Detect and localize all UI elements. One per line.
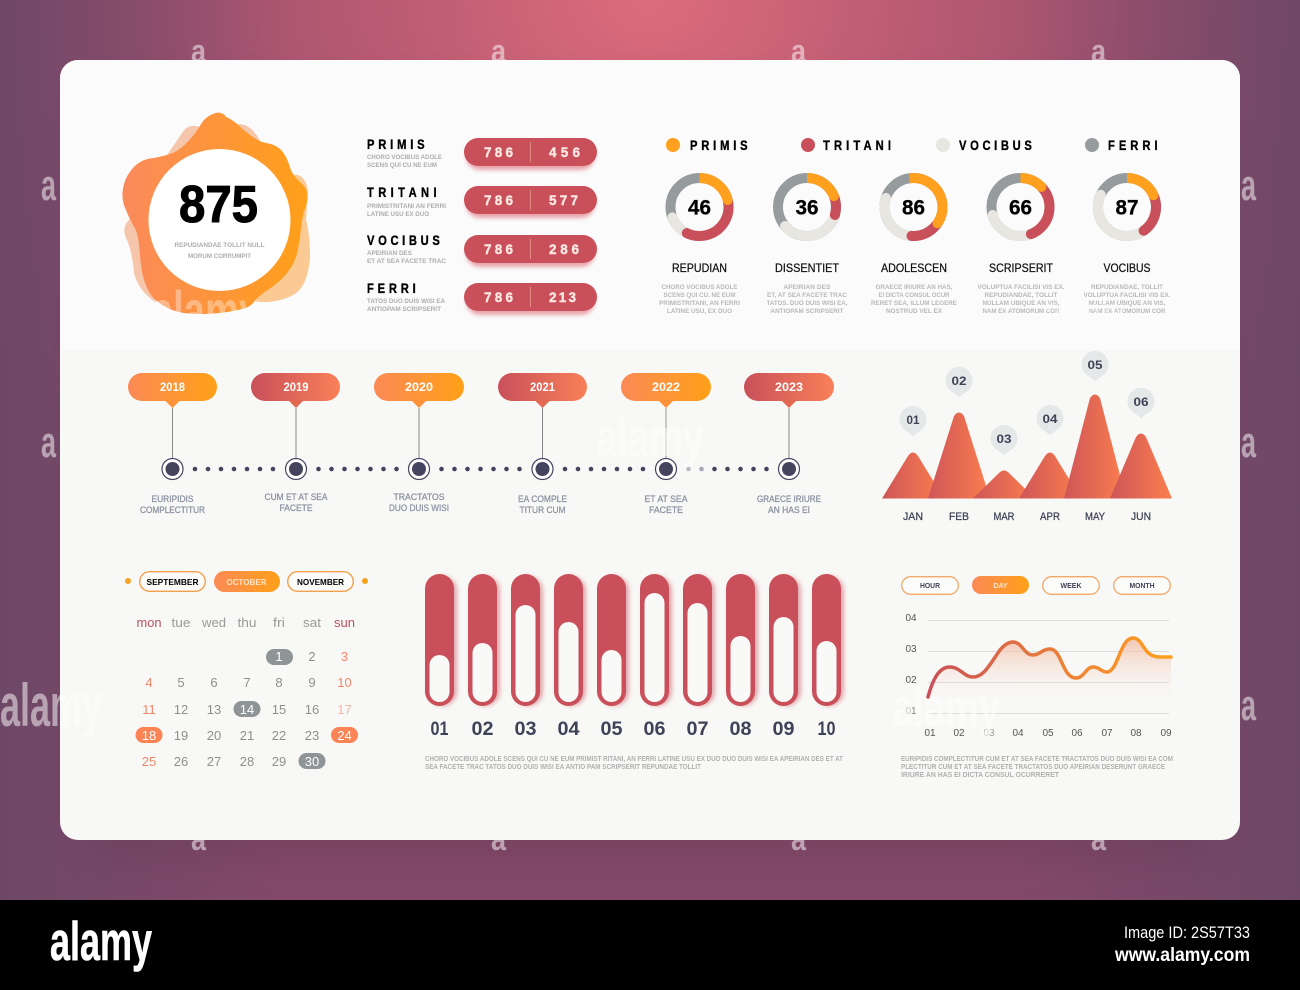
milestone 2020: [374, 373, 464, 514]
month labels: [903, 511, 1151, 523]
month selector: SEPTEMBER: [146, 577, 198, 587]
footer bar: [0, 900, 1300, 990]
website: www.alamy.com: [1114, 945, 1250, 966]
row: primis: PRIMIS: [367, 137, 425, 152]
pin 04: 04: [1042, 412, 1058, 426]
date grid: 17: [337, 702, 352, 717]
milestone 2019: FACETE: [280, 503, 312, 514]
date grid: 26: [174, 754, 188, 769]
milestone 2021: [498, 373, 587, 516]
pin 03: 03: [996, 432, 1012, 446]
range buttons: DAY: [994, 581, 1008, 590]
range buttons: WEEK: [1060, 581, 1082, 590]
donut: dissentiet: ET, AT SEA FACETE TRAC: [767, 292, 847, 299]
date grid: 11: [142, 702, 156, 717]
month labels: JAN: [903, 511, 923, 523]
donut: repudian: PRIMISTRITANI, AN FERRI: [659, 300, 740, 307]
row: vocibus: 786: [484, 242, 513, 257]
date grid: 22: [272, 728, 286, 743]
row: tritani: [367, 185, 597, 218]
bar chart caption: CHORO VOCIBUS ADOLE SCENS QUI CU NE EUM PRIMIST RITANI, AN FERRI LATINE USU EX DUO DUO DUIS WISI EA APEIRIAN DES ET AT: [425, 756, 844, 763]
bar labels: 03: [514, 719, 536, 740]
row: tritani: TRITANI: [367, 185, 437, 200]
donut: dissentiet: APEIRIAN DES: [784, 284, 831, 291]
pin 05: [1082, 351, 1108, 381]
x axis labels: 09: [1160, 728, 1172, 739]
date grid: 5: [177, 675, 185, 690]
bar labels: 09: [772, 719, 794, 740]
milestone 2019: CUM ET AT SEA: [264, 492, 328, 503]
weekday header: mon: [136, 615, 162, 630]
donut: vocibus: [1084, 167, 1171, 315]
bar labels: 10: [818, 719, 836, 740]
donut: vocibus: REPUDIANDAE, TOLLIT: [1091, 284, 1163, 291]
pin 02: 02: [952, 374, 967, 388]
pin 01: 01: [906, 413, 920, 427]
date grid: 29: [272, 754, 286, 769]
month labels: JUN: [1131, 511, 1151, 523]
donut: repudian: LATINE USU, EX DUO: [667, 308, 732, 315]
dashboard card: [60, 60, 1240, 840]
date grid: 7: [243, 675, 251, 690]
x axis labels: 03: [983, 728, 995, 739]
donut: scripserit: VOLUPTUA FACILISI VIS EX.: [978, 284, 1065, 291]
x axis labels: [924, 728, 1172, 739]
watermarks: [0, 279, 1125, 739]
watermark letters on background: a: [1241, 681, 1256, 730]
line chart caption: EURIPIDIS COMPLECTITUR CUM ET AT SEA FACETE TRACTATOS DUO DUIS WISI EA COM: [901, 756, 1173, 763]
month labels: APR: [1040, 511, 1060, 523]
timeline dots: [193, 467, 769, 471]
weekday header: thu: [238, 615, 256, 630]
donut: adolescen: RERET SEA, ILLUM LEGERE: [871, 300, 958, 307]
watermark letters on background: a: [191, 33, 206, 69]
row: ferri: FERRI: [367, 281, 416, 296]
total caption: REPUDIANDAE TOLLIT NULL: [174, 242, 264, 249]
donut: adolescen: NOSTRUD VEL EX: [886, 308, 943, 315]
x axis labels: 07: [1101, 728, 1113, 739]
row: vocibus: 286: [549, 242, 579, 257]
milestone 2021: EA COMPLE: [518, 494, 567, 505]
month labels: MAY: [1085, 511, 1106, 523]
row: ferri: 213: [549, 290, 576, 305]
donut: scripserit: [978, 166, 1065, 315]
donut: adolescen: ADOLESCEN: [881, 261, 947, 275]
donut: adolescen: 86: [902, 196, 925, 220]
donut: repudian: REPUDIAN: [672, 261, 727, 275]
panel: category value rows: [367, 137, 597, 315]
bar fills: [430, 593, 836, 702]
pin 06: [1128, 388, 1154, 418]
month selector: NOVEMBER: [297, 577, 344, 587]
date grid: 25: [142, 754, 156, 769]
row: vocibus: ET AT SEA FACETE TRAC: [367, 258, 446, 265]
watermarks: alamy: [892, 678, 1000, 738]
watermark letters on background: a: [491, 821, 506, 857]
milestone 2020: DUO DUIS WISI: [389, 503, 449, 514]
timeline: [128, 373, 834, 516]
bar chart caption: SEA FACETE TRAC TATOS DUO DUIS WISI EA ANTIO PAM SCRIPSERIT REPUNDAE TOLLIT: [425, 764, 702, 771]
watermark letters on background: a: [791, 33, 806, 69]
donut: vocibus: NULLAM UBIQUE AN VIS,: [1088, 300, 1166, 307]
date grid: 9: [308, 675, 316, 690]
milestone 2021: TITUR CUM: [520, 505, 566, 516]
watermark letters on background: a: [1241, 418, 1256, 467]
pin 06: 06: [1134, 395, 1149, 409]
date grid: 13: [207, 702, 221, 717]
donut: scripserit: NULLAM UBIQUE AN VIS,: [982, 300, 1060, 307]
x axis labels: 06: [1071, 728, 1083, 739]
x axis labels: 08: [1130, 728, 1142, 739]
watermark letters on background: a: [1091, 33, 1106, 69]
milestone 2023: GRAECE IRIURE: [757, 494, 821, 505]
mountain chart: [882, 351, 1172, 523]
range buttons: HOUR: [920, 581, 941, 590]
image id: Image ID: 2S57T33: [1124, 923, 1250, 942]
month labels: FEB: [949, 511, 969, 523]
watermarks: alamy: [596, 408, 704, 468]
y axis labels: [905, 613, 917, 717]
month selector: [125, 571, 368, 592]
row: ferri: TATOS DUO DUIS WISI EA: [367, 298, 445, 305]
area under curve: [928, 638, 1171, 716]
y axis labels: 02: [905, 675, 917, 686]
range buttons: [902, 576, 1170, 594]
date grid: 21: [240, 728, 254, 743]
donut: repudian: CHORO VOCIBUS ADOLE: [662, 284, 738, 291]
watermark letters on background: a: [1241, 161, 1256, 210]
row: primis: 456: [549, 145, 580, 160]
donut: scripserit: NAM EX ATOMORUM COR: [982, 308, 1060, 315]
donut: dissentiet: 36: [796, 196, 818, 220]
row: vocibus: [367, 233, 597, 267]
date grid: 14: [240, 702, 254, 717]
weekday header: fri: [273, 615, 285, 630]
y axis labels: 04: [905, 613, 917, 624]
total caption: MORUM CORRUMPIT: [188, 253, 251, 260]
bar labels: 07: [686, 719, 708, 740]
row: tritani: LATINE USU EX DUO: [367, 211, 429, 218]
pin 01: [900, 406, 926, 436]
y axis labels: 01: [905, 706, 917, 717]
donut: repudian: SCENS QUI CU. NE EUM: [664, 292, 736, 299]
date grid: 24: [337, 728, 352, 743]
bars: [425, 574, 841, 706]
date grid: 3: [341, 649, 348, 664]
milestone 2023: AN HAS EI: [768, 505, 810, 516]
line chart: [901, 576, 1173, 779]
date grid: 8: [275, 675, 283, 690]
date grid: 4: [145, 675, 153, 690]
date grid: 12: [174, 702, 188, 717]
line chart caption: IRIURE AN HAS EI DICTA CONSUL OCURRERET: [901, 772, 1060, 779]
donut: scripserit: REPUDIANDAE, TOLLIT: [984, 292, 1058, 299]
date grid: 16: [305, 702, 319, 717]
watermark letters on background: a: [1091, 821, 1106, 857]
date grid: [136, 649, 358, 769]
pin 03: [990, 425, 1018, 455]
date grid: 10: [337, 675, 352, 690]
footer logo: alamy: [50, 910, 152, 972]
row: ferri: ANTIOPAM SCRIPSERIT: [367, 306, 441, 313]
row: tritani: PRIMISTRITANI AN FERRI: [367, 203, 446, 210]
row: tritani: 786: [484, 193, 513, 208]
milestone 2022: [621, 373, 711, 516]
donut legend: FERRI: [1108, 138, 1158, 153]
milestone 2018: COMPLECTITUR: [140, 505, 205, 516]
bar labels: 08: [730, 719, 752, 740]
bar labels: 04: [558, 719, 580, 740]
range buttons: MONTH: [1130, 581, 1154, 590]
date grid: 6: [210, 675, 218, 690]
milestone 2018: [128, 373, 217, 516]
row: primis: SCENS QUI CU NE EUM: [367, 162, 437, 169]
donut legend: TRITANI: [823, 138, 891, 153]
bar labels: 02: [472, 719, 494, 740]
donut: repudian: [659, 168, 740, 315]
donut: dissentiet: DISSENTIET: [775, 261, 840, 275]
row: primis: 786: [484, 145, 513, 160]
card shadow: [90, 90, 1210, 860]
milestone 2023: [744, 373, 834, 516]
donut legend: [666, 138, 1158, 153]
bar shadows: [428, 576, 844, 706]
x axis labels: 05: [1042, 728, 1054, 739]
calendar: [125, 571, 368, 769]
milestone 2019: 2019: [284, 380, 309, 394]
donut: vocibus: VOLUPTUA FACILISI VIS EX.: [1084, 292, 1171, 299]
donut legend: PRIMIS: [690, 138, 748, 153]
peaks: [882, 394, 1172, 498]
date grid: 19: [174, 728, 188, 743]
donut legend: VOCIBUS: [959, 138, 1032, 153]
watermarks: alamy: [0, 672, 102, 739]
milestone 2018: 2018: [160, 380, 185, 394]
row: vocibus: APEIRIAN DES: [367, 250, 413, 257]
row: vocibus: VOCIBUS: [367, 233, 440, 248]
milestone 2022: FACETE: [649, 505, 683, 516]
weekday header: [136, 615, 355, 630]
bar labels: [430, 719, 836, 740]
bar chart caption: [425, 756, 844, 771]
weekday header: tue: [172, 615, 190, 630]
watermark letters on background: a: [791, 821, 806, 857]
donut: scripserit: SCRIPSERIT: [989, 261, 1054, 275]
donut: dissentiet: TATOS. DUO DUIS WISI EA,: [766, 300, 848, 307]
donut: vocibus: VOCIBUS: [1104, 261, 1150, 275]
row: ferri: [367, 281, 597, 315]
total value: 875: [179, 176, 258, 234]
donut: scripserit: 66: [1009, 196, 1032, 220]
row: primis: [367, 137, 597, 170]
milestone 2023: 2023: [775, 380, 803, 394]
bar labels: 01: [430, 719, 449, 740]
month selector: OCTOBER: [226, 577, 266, 587]
watermark letters on background: a: [491, 33, 506, 69]
donut: repudian: 46: [688, 196, 711, 220]
watermark letters on background: a: [41, 161, 56, 210]
watermark letters on background: a: [191, 821, 206, 857]
donut: vocibus: 87: [1116, 196, 1138, 220]
line chart caption: [901, 756, 1173, 779]
row: primis: CHORO VOCIBUS ADOLE: [367, 154, 443, 161]
panel: total score blob: [122, 112, 310, 314]
bar chart: [425, 574, 844, 771]
milestone 2022: 2022: [652, 380, 680, 394]
milestone 2020: 2020: [405, 380, 433, 394]
weekday header: sat: [303, 615, 321, 630]
x axis labels: 04: [1012, 728, 1024, 739]
row: ferri: 786: [484, 290, 513, 305]
milestone 2020: TRACTATOS: [394, 492, 444, 503]
weekday header: sun: [334, 615, 355, 630]
milestone 2018: EURIPIDIS: [152, 494, 194, 505]
date grid: 1: [275, 649, 283, 664]
date grid: 18: [142, 728, 156, 743]
pin 05: 05: [1088, 358, 1103, 372]
pin 02: [945, 367, 973, 397]
x axis labels: 01: [924, 728, 936, 739]
milestone 2022: ET AT SEA: [644, 494, 688, 505]
date grid: 2: [308, 649, 316, 664]
date grid: 30: [305, 754, 319, 769]
line chart caption: PLECTITUR CUM ET AT SEA FACETE TRACTATOS DUO APEIRIAN DESERUNT GRAECE: [901, 764, 1165, 771]
donut: adolescen: EI DICTA CONSUL OCUR: [878, 292, 950, 299]
milestone 2019: [251, 373, 340, 514]
date grid: 20: [207, 728, 221, 743]
donut: dissentiet: [766, 169, 848, 315]
milestone 2021: 2021: [530, 380, 555, 394]
curve: [928, 638, 1171, 697]
watermark letters on background: a: [41, 418, 56, 467]
x axis labels: 02: [953, 728, 965, 739]
donut: vocibus: NAM EX ATOMORUM COR: [1088, 308, 1166, 315]
bar labels: 05: [600, 719, 623, 740]
date grid: 28: [240, 754, 254, 769]
date grid: 23: [305, 728, 319, 743]
bar labels: 06: [644, 719, 666, 740]
month labels: MAR: [994, 511, 1015, 523]
date grid: 27: [207, 754, 221, 769]
weekday header: wed: [201, 615, 226, 630]
watermark letters on background: [41, 33, 1256, 857]
donut: adolescen: GRAECE IRIURE AN HAS,: [876, 284, 953, 291]
watermarks: alamy: [1045, 285, 1125, 341]
donut: dissentiet: ANTIOPAM SCRIPSERIT: [770, 308, 844, 315]
pin 04: [1036, 405, 1064, 435]
grid lines: [928, 620, 1169, 714]
donut: adolescen: [871, 167, 958, 315]
total caption: [174, 242, 264, 260]
row: tritani: 577: [549, 193, 578, 208]
y axis labels: 03: [905, 644, 917, 655]
date grid: 15: [272, 702, 286, 717]
watermarks: alamy: [152, 279, 260, 342]
